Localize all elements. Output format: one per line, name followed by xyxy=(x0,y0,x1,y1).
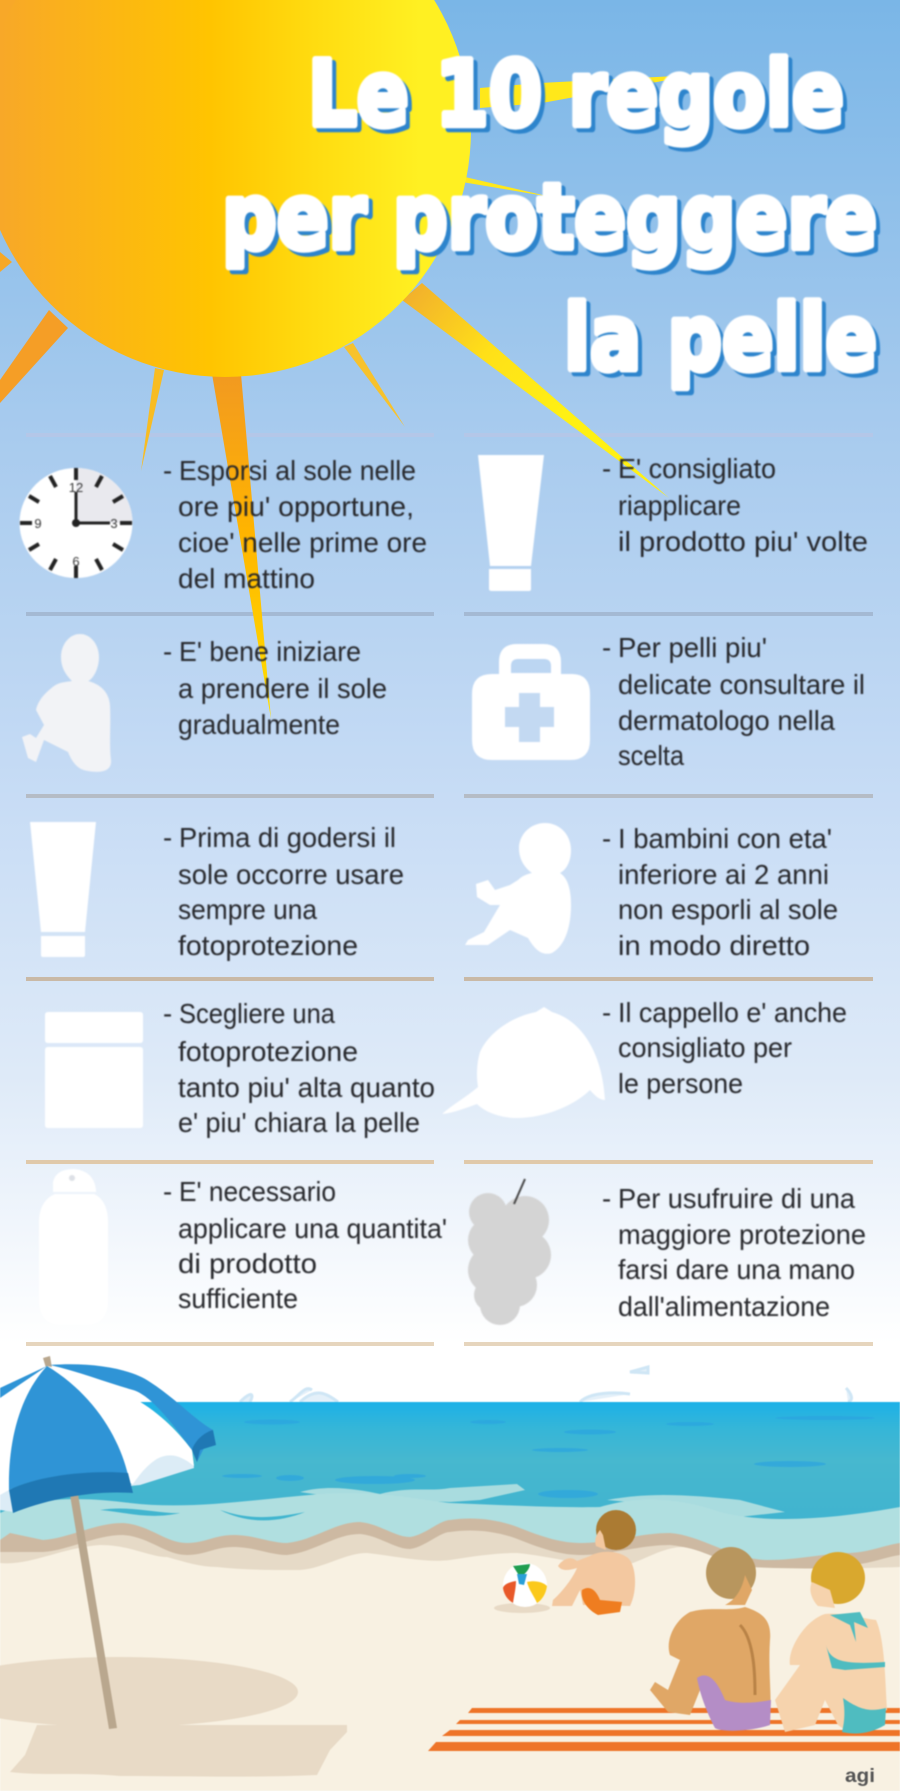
rule 1: hours xyxy=(20,455,427,594)
text: rule 5 xyxy=(163,1176,447,1314)
towel xyxy=(428,1708,900,1751)
text: rule 1: - xyxy=(163,455,172,486)
beach scene xyxy=(0,1356,900,1791)
text: rule 2 xyxy=(163,636,387,740)
text: rule 4: - xyxy=(163,998,172,1029)
text: rule 9: - xyxy=(602,997,611,1028)
text: rule 1: cioe' nelle prime ore xyxy=(178,527,427,558)
text: rule 3 xyxy=(163,822,404,961)
text: rule 5: sufficiente xyxy=(178,1283,298,1314)
umbrella xyxy=(0,1356,216,1729)
text: rule 7: Per pelli piu' xyxy=(618,632,767,663)
child xyxy=(552,1510,636,1615)
credit: agi: agi xyxy=(845,1766,875,1787)
text: rule 8: inferiore ai 2 anni xyxy=(618,859,829,890)
title xyxy=(222,42,877,391)
rule 2: gradually xyxy=(22,634,387,772)
text: rule 10: Per usufruire di una xyxy=(618,1183,856,1214)
icon: jar xyxy=(45,1012,143,1128)
text: rule 8: I bambini con eta' xyxy=(618,823,832,854)
text: rule 6 xyxy=(602,453,868,557)
text: rule 7: scelta xyxy=(618,740,685,771)
icon: cap xyxy=(442,1007,605,1118)
text: rule 8 xyxy=(602,823,838,961)
text: rule 10: - xyxy=(602,1183,611,1214)
text: rule 10: maggiore protezione xyxy=(618,1219,866,1250)
icon: clock: 3 xyxy=(110,516,118,531)
rule 9: hat xyxy=(442,997,847,1118)
text: rule 8: in modo diretto xyxy=(618,930,810,961)
dry sand edge xyxy=(0,1531,900,1620)
text: rule 6: E' consigliato xyxy=(618,453,776,484)
text: rule 3: - xyxy=(163,822,172,853)
text: rule 2: E' bene iniziare xyxy=(179,636,361,667)
text: rule 2: - xyxy=(163,636,172,667)
text: rule 10 xyxy=(602,1183,866,1322)
foam waves xyxy=(100,1508,305,1520)
text: rule 5: di prodotto xyxy=(178,1248,317,1279)
wet sand xyxy=(0,1519,900,1600)
text: rule 1: del mattino xyxy=(178,563,315,594)
text: rule 1: ore piu' opportune, xyxy=(178,491,414,522)
text: rule 7: - xyxy=(602,632,611,663)
text: rule 5: - xyxy=(163,1176,172,1207)
text: rule 8: non esporli al sole xyxy=(618,894,838,925)
umbrella shadow xyxy=(0,1657,347,1777)
text: rule 4 xyxy=(163,998,435,1138)
icon: tube xyxy=(30,822,96,957)
text: rule 8: - xyxy=(602,823,611,854)
rule 10: nutrition xyxy=(468,1179,866,1325)
text: rule 5: applicare una quantita' xyxy=(178,1213,447,1244)
text: rule 6: il prodotto piu' volte xyxy=(618,526,868,557)
icon: clock: 12 xyxy=(69,480,83,495)
text: rule 9: le persone xyxy=(618,1068,743,1099)
rule 8: children xyxy=(465,823,838,961)
icon: first aid kit xyxy=(472,644,590,760)
icon: grapes xyxy=(468,1179,551,1325)
icon: clock: 9 xyxy=(34,516,42,531)
text: rule 5: E' necessario xyxy=(179,1176,336,1207)
icon: clock xyxy=(20,468,132,578)
dividers xyxy=(26,433,873,1346)
text: rule 1: Esporsi al sole nelle xyxy=(179,455,416,486)
sand xyxy=(0,1545,900,1791)
text: rule 3: fotoprotezione xyxy=(178,930,358,961)
rule 5: quantity xyxy=(39,1169,447,1325)
text: rule 3: sole occorre usare xyxy=(178,859,404,890)
text: rule 7: delicate consultare il xyxy=(618,669,865,700)
icon: child silhouette xyxy=(465,823,571,954)
text: rule 3: Prima di godersi il xyxy=(179,822,396,853)
icon: tube xyxy=(478,455,544,591)
rule 3: photoprotection xyxy=(30,822,404,961)
text: rule 9: Il cappello e' anche xyxy=(618,997,847,1028)
text: rule 3: sempre una xyxy=(178,894,318,925)
text: rule 4: Scegliere una xyxy=(179,998,336,1029)
sun with rays xyxy=(0,0,695,719)
rule 7: dermatologist xyxy=(472,632,865,771)
text: rule 7 xyxy=(602,632,865,771)
man xyxy=(650,1547,771,1731)
text: rule 4: fotoprotezione xyxy=(178,1036,358,1067)
text: rule 10: farsi dare una mano xyxy=(618,1254,855,1285)
text: rule 1 xyxy=(163,455,427,594)
rule 4: high protection xyxy=(45,998,435,1138)
text: rule 6: riapplicare xyxy=(618,490,741,521)
text: rule 4: tanto piu' alta quanto xyxy=(178,1072,435,1103)
foam xyxy=(0,1493,900,1600)
text: rule 9: consigliato per xyxy=(618,1032,792,1063)
text: rule 2: gradualmente xyxy=(178,709,340,740)
text: rule 10: dall'alimentazione xyxy=(618,1291,830,1322)
sea xyxy=(0,1367,900,1532)
text: rule 9 xyxy=(602,997,847,1099)
beach ball xyxy=(494,1563,550,1613)
text: rule 7: dermatologo nella xyxy=(618,705,836,736)
rule 6: reapply xyxy=(478,453,868,591)
icon: sitting person xyxy=(22,634,111,772)
text: rule 6: - xyxy=(602,453,611,484)
text: rule 2: a prendere il sole xyxy=(178,673,387,704)
icon: clock: 6 xyxy=(72,554,80,569)
icon: spray bottle xyxy=(39,1169,108,1325)
woman xyxy=(775,1552,887,1734)
text: rule 4: e' piu' chiara la pelle xyxy=(178,1107,420,1138)
